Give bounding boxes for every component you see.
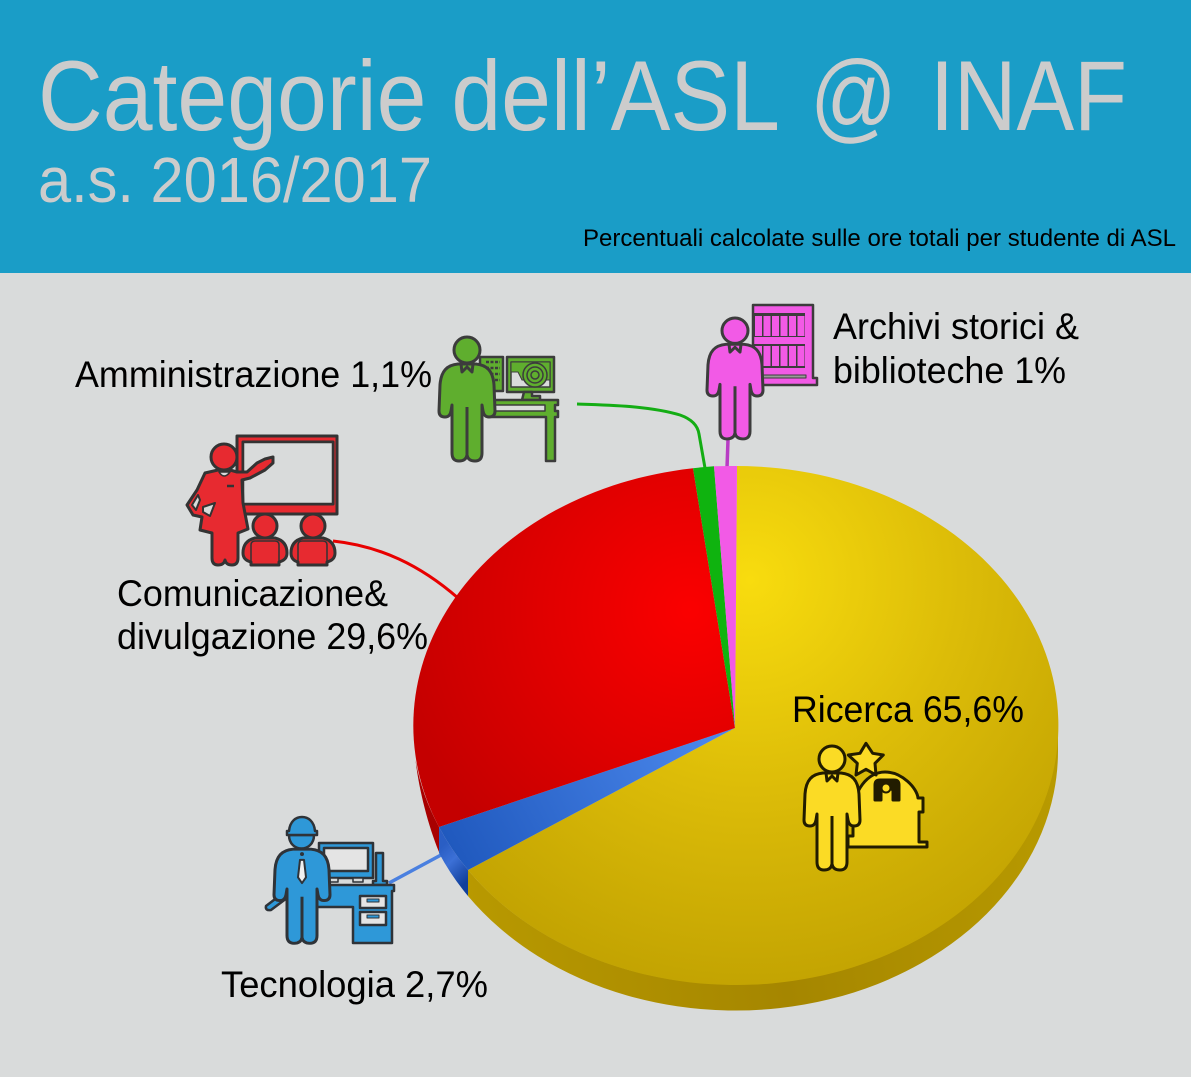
label: Amministrazione: Amministrazione 1,1% bbox=[75, 354, 432, 395]
title: @ bbox=[810, 40, 897, 151]
subtitle: a.s. 2016/2017 bbox=[38, 144, 432, 216]
icon: librarian at bookshelf bbox=[707, 305, 817, 439]
slice: Archivi bbox=[714, 466, 737, 728]
title: Categorie dell’ASL bbox=[38, 40, 780, 151]
label: Tecnologia: Tecnologia 2,7% bbox=[221, 964, 488, 1005]
icon: researcher with observatory bbox=[804, 743, 927, 870]
label: Comunicazione e divulgazione bbox=[117, 573, 428, 657]
icon: administrator at computer desk bbox=[439, 337, 558, 461]
side: blue bbox=[439, 827, 468, 896]
slice: Comunicazione bbox=[413, 468, 735, 827]
label: Archivi storici e biblioteche: Archivi storici & bbox=[833, 306, 1079, 347]
note: Percentuali calcolate sulle ore totali per studente di ASL bbox=[583, 225, 1176, 252]
connector lines bbox=[333, 404, 728, 883]
side: yellow bbox=[468, 726, 1058, 1011]
title: INAF bbox=[930, 40, 1127, 151]
slice: Tecnologia bbox=[439, 728, 735, 870]
label: Comunicazione e divulgazione: divulgazione 29,6% bbox=[117, 616, 428, 657]
side: red bbox=[416, 760, 439, 852]
pie chart bbox=[413, 466, 1058, 1011]
label: Comunicazione e divulgazione: Comunicazione& bbox=[117, 573, 388, 614]
icon: teacher with board and students bbox=[187, 436, 337, 565]
slice: Amministrazione bbox=[693, 466, 735, 728]
label: Ricerca: Ricerca 65,6% bbox=[792, 689, 1024, 730]
header band bbox=[0, 0, 1191, 273]
label: Archivi storici e biblioteche bbox=[833, 306, 1079, 391]
slice: Ricerca bbox=[468, 466, 1058, 985]
background panel bbox=[0, 273, 1191, 1077]
icon: technician at workstation bbox=[266, 817, 394, 943]
label: Archivi storici e biblioteche: biblioteche 1% bbox=[833, 350, 1066, 391]
